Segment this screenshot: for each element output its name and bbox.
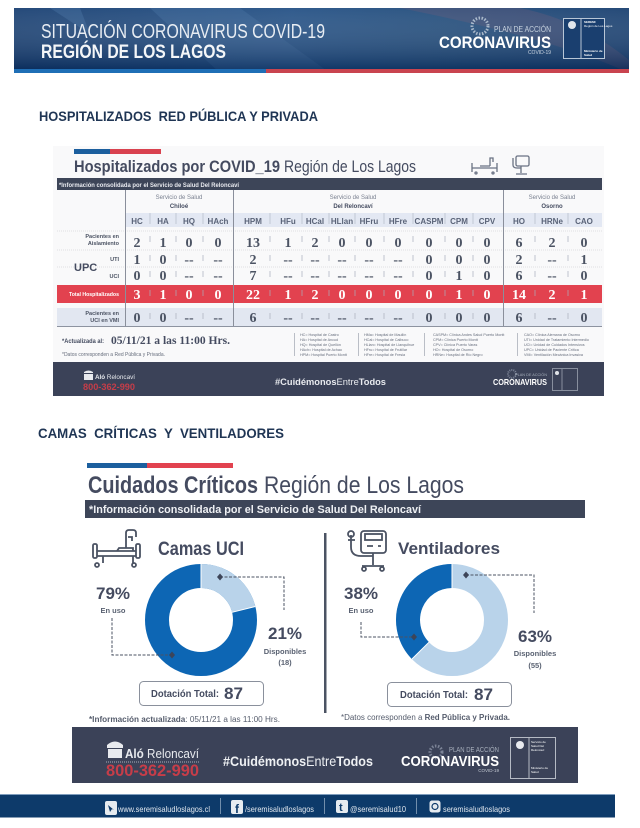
callout: ventiladores en uso: [344, 584, 417, 640]
header logo: plan de acción coronavirus: [439, 18, 551, 56]
service headers: Osorno: [541, 204, 563, 210]
row: pacientes en aislamiento: 0: [394, 236, 402, 251]
row: total hospitalizados: 0: [484, 288, 490, 303]
legend: hospital abbreviations: HQ= Hospital de Quellón: [300, 343, 341, 347]
row: total hospitalizados: 0: [338, 288, 346, 303]
row: uti: 0: [484, 253, 490, 268]
legend: hospital abbreviations: CAO= Clínica Alemana de Osorno: [524, 333, 580, 337]
row: uci: --: [184, 269, 194, 284]
row labels: Pacientes en: [85, 311, 120, 317]
icon: ventilator: [348, 531, 386, 571]
update note: 05/11/21 a las 11:00 Hrs.: [111, 333, 230, 347]
service headers: Servicio de Salud: [330, 195, 376, 201]
footer: instagram: [430, 800, 510, 814]
info bar: *Información consolidada por el Servicio de Salud Del Reloncaví: [89, 504, 422, 516]
row: total hospitalizados: 0: [426, 288, 432, 303]
legend: hospital abbreviations: HCal= Hospital de Calbuco: [364, 338, 408, 342]
callout: camas en uso: [96, 584, 175, 658]
row: uti: 2: [250, 253, 256, 268]
row: uti: --: [310, 253, 320, 268]
legend: hospital abbreviations: VMI= Ventilación Mecánica Invasiva: [524, 353, 584, 357]
row: total hospitalizados: 1: [284, 288, 292, 303]
row: total hospitalizados: 1: [160, 288, 166, 303]
row: pacientes en aislamiento: 0: [338, 236, 346, 251]
column headers: HRNe: [541, 217, 563, 226]
column headers: HLlan: [331, 217, 353, 226]
header title: SITUACIÓN CORONAVIRUS COVID-19: [41, 20, 325, 43]
row: uti: 2: [516, 253, 522, 268]
row: uci: 0: [160, 269, 166, 284]
icon: hospital bed small: [472, 158, 497, 174]
column headers: HAch: [208, 217, 229, 226]
legend: hospital abbreviations: HFre= Hospital de Fresia: [364, 353, 406, 357]
row: pacientes en aislamiento: 2: [312, 236, 318, 251]
logo: servicio de salud: Salud: [531, 770, 539, 774]
table title: [74, 157, 416, 176]
row: total hospitalizados: 0: [214, 288, 222, 303]
column headers: HQ: [183, 217, 195, 226]
donut: ventiladores: [408, 564, 496, 664]
total row band: [57, 285, 602, 303]
row: uti: 0: [426, 253, 432, 268]
callout: ventiladores en uso: 38%: [344, 584, 378, 603]
vmi row band: [57, 308, 602, 326]
header logo: ministerio: Región de Los Lagos: [584, 24, 613, 28]
callout: ventiladores disponibles: 63%: [518, 627, 552, 646]
row: uci: --: [337, 269, 347, 284]
row: uci: 7: [250, 269, 256, 284]
row: total hospitalizados: 2: [312, 288, 318, 303]
table footer band: Aló Reloncaví: [95, 374, 135, 381]
row: total hospitalizados: 3: [134, 288, 140, 303]
footnote: información actualizada: *Información actualizada : 05/11/21 a las 11:00 Hrs.: [89, 715, 280, 724]
table footer band: CORONAVIRUS: [493, 377, 547, 387]
header title: [41, 20, 325, 63]
title: ventiladores: Ventiladores: [398, 539, 500, 558]
row: uci en vmi: --: [337, 311, 347, 326]
footer: facebook: f: [235, 802, 240, 816]
row labels: UCI en VMI: [90, 318, 119, 324]
row labels: [69, 234, 120, 324]
heading: hospitalizados: HOSPITALIZADOS RED PÚBLICA Y PRIVADA: [39, 107, 318, 124]
callout: ventiladores disponibles: (55): [528, 661, 542, 670]
table footer band: #CuidémonosEntreTodos: [275, 377, 386, 388]
column headers: [131, 217, 593, 226]
row: uci en vmi: 6: [516, 311, 522, 326]
legend: hospital abbreviations: HAch= Hospital de Achao: [300, 348, 342, 352]
row: uci en vmi: 0: [426, 311, 432, 326]
row: uci en vmi: --: [213, 311, 223, 326]
panel title: Región de Los Lagos: [264, 472, 464, 499]
column headers: CPM: [450, 217, 468, 226]
logo: coronavirus: COVID-19: [478, 768, 499, 773]
row: uci en vmi: --: [310, 311, 320, 326]
row: uci: [134, 269, 588, 284]
callout: camas disponibles: 21%: [268, 624, 302, 643]
donut: camas uci: [157, 564, 255, 664]
row: uti: --: [547, 253, 557, 268]
row: uci: --: [283, 269, 293, 284]
box: dotación total camas: 87: [224, 684, 243, 703]
table footer band: 800-362-990: [83, 382, 135, 392]
legend: hospital abbreviations: UPC= Unidad de Paciente Crítica: [524, 348, 580, 352]
row: pacientes en aislamiento: 0: [366, 236, 372, 251]
row: uti: --: [213, 253, 223, 268]
box: dotación total camas: Dotación Total:: [151, 689, 219, 700]
footer: facebook: /seremisaludloslagos: [245, 804, 314, 814]
row labels: UPC: [74, 262, 97, 274]
row: uci: 0: [426, 269, 432, 284]
panel title: [88, 472, 464, 499]
row: uci en vmi: 0: [134, 311, 140, 326]
header title: REGIÓN DE LOS LAGOS: [41, 41, 226, 63]
footer: twitter: [336, 800, 406, 814]
hashtag: #CuidémonosEntreTodos: [223, 753, 373, 769]
legend: hospital abbreviations: HLlan= Hospital de Llanquihue: [364, 343, 414, 347]
service headers: Chiloé: [170, 204, 189, 210]
row labels: UTI: [110, 257, 119, 263]
row: uci en vmi: --: [547, 311, 557, 326]
row: total hospitalizados: 1: [580, 288, 588, 303]
row: total hospitalizados: 22: [246, 288, 260, 303]
footer: twitter: @seremisalud10: [350, 804, 406, 814]
row: uti: [134, 253, 588, 268]
row: uci en vmi: --: [393, 311, 403, 326]
row labels: Total Hospitalizados: [69, 292, 119, 298]
row: uci en vmi: 0: [580, 311, 588, 326]
logo: servicio de salud: [510, 738, 556, 778]
row: uti: 1: [134, 253, 140, 268]
callout: camas en uso: En uso: [100, 606, 126, 615]
icon: ventilator small: [513, 156, 529, 174]
footnote: datos: *Datos corresponden a Red Pública y Privada.: [341, 713, 510, 722]
row: total hospitalizados: 0: [394, 288, 402, 303]
row: uci: --: [393, 269, 403, 284]
row: uti: 0: [160, 253, 166, 268]
row: uci: 0: [484, 269, 490, 284]
logo: coronavirus: CORONAVIRUS: [401, 753, 499, 770]
table title: Región de Los Lagos: [284, 157, 416, 176]
header logo: ministerio: Ministerio de: [584, 49, 603, 53]
legend: hospital abbreviations: HFru= Hospital de Frutillar: [364, 348, 408, 352]
row: total hospitalizados: 14: [512, 288, 526, 303]
row: uci: --: [213, 269, 223, 284]
row: uci en vmi: [134, 311, 588, 326]
footer bar: [0, 794, 615, 818]
update note: [62, 333, 230, 358]
row: uti: --: [184, 253, 194, 268]
row: uti: --: [393, 253, 403, 268]
row: pacientes en aislamiento: 0: [214, 236, 222, 251]
service headers: Servicio de Salud: [529, 195, 575, 201]
column headers: CASPM: [415, 217, 444, 226]
column headers: HPM: [244, 217, 262, 226]
legend: hospital abbreviations: CPM= Clínica Puerto Montt: [433, 338, 478, 342]
service headers: Servicio de Salud: [156, 195, 202, 201]
callout: ventiladores disponibles: [463, 572, 556, 670]
callout: camas disponibles: Disponibles: [264, 647, 306, 656]
row: uci: --: [364, 269, 374, 284]
logo: servicio de salud: Reloncaví: [531, 748, 545, 752]
box: dotación total ventiladores: Dotación Total:: [400, 690, 468, 701]
header logo: ministerio: [564, 18, 613, 59]
row: uci en vmi: 6: [250, 311, 256, 326]
row: uci: 6: [516, 269, 522, 284]
legend: hospital abbreviations: [300, 333, 589, 357]
bottom band: [72, 727, 578, 783]
panel: cuidados críticos: [72, 463, 585, 783]
legend: hospital abbreviations: UTI= Unidad de Tratamiento Intermedio: [524, 338, 589, 342]
table footer band: PLAN DE ACCIÓN: [515, 372, 547, 377]
footer: instagram: seremisaludloslagos: [443, 804, 510, 814]
info bar: [85, 500, 585, 518]
legend: hospital abbreviations: HC= Hospital de Castro: [300, 333, 339, 337]
footer: website: [105, 801, 210, 815]
row: total hospitalizados: 1: [456, 288, 462, 303]
row: pacientes en aislamiento: [134, 236, 588, 251]
column headers: CAO: [575, 217, 593, 226]
callout: camas disponibles: (18): [278, 658, 292, 667]
legend: hospital abbreviations: HPM= Hospital Puerto Montt: [300, 353, 347, 357]
row: pacientes en aislamiento: 2: [134, 236, 140, 251]
legend: hospital abbreviations: CASPM= Clínica Andes Salud Puerto Montt: [433, 333, 504, 337]
row: pacientes en aislamiento: 0: [580, 236, 588, 251]
row: pacientes en aislamiento: 1: [284, 236, 292, 251]
header banner: [14, 8, 629, 73]
legend: hospital abbreviations: HRNe= Hospital de Río Negro: [433, 353, 482, 357]
aló reloncaví phone line: 800-362-990: [106, 761, 199, 780]
aló reloncaví phone line: Aló Reloncaví: [125, 746, 199, 761]
logo: servicio de salud: Salud Del: [531, 744, 544, 748]
row: total hospitalizados: 2: [548, 288, 556, 303]
callout: camas disponibles: [217, 574, 306, 667]
service headers: Del Reloncaví: [333, 204, 373, 210]
icon: hospital bed: [93, 530, 140, 567]
box: dotación total ventiladores: [388, 682, 512, 706]
panel: hospitalizados table: [53, 146, 604, 396]
row: uti: 0: [456, 253, 462, 268]
update note: *Datos corresponden a Red Pública y Privada.: [62, 352, 165, 358]
row: uci en vmi: --: [184, 311, 194, 326]
table footer band: [53, 362, 604, 396]
row: uci: 1: [456, 269, 462, 284]
column headers: HCal: [306, 217, 324, 226]
box: dotación total camas: [140, 682, 264, 706]
row: uci: --: [547, 269, 557, 284]
legend: hospital abbreviations: HO= Hospital de Osorno: [433, 348, 473, 352]
row: pacientes en aislamiento: 0: [186, 236, 192, 251]
logo: coronavirus: PLAN DE ACCIÓN: [449, 745, 499, 754]
row: pacientes en aislamiento: 0: [484, 236, 490, 251]
row labels: UCI: [110, 274, 119, 280]
update note: *Actualizada al:: [62, 338, 104, 345]
column headers: HFre: [389, 217, 408, 226]
row: uci en vmi: --: [283, 311, 293, 326]
row: uti: --: [283, 253, 293, 268]
box: dotación total ventiladores: 87: [474, 685, 493, 704]
header logo: ministerio: SEREMI: [584, 20, 596, 24]
logo: coronavirus: [401, 745, 499, 773]
column headers: HFru: [360, 217, 378, 226]
header logo: plan de acción coronavirus: CORONAVIRUS: [439, 33, 551, 52]
row: uci: 0: [580, 269, 588, 284]
row: uci: --: [310, 269, 320, 284]
title: camas uci: Camas UCI: [158, 539, 244, 560]
row: pacientes en aislamiento: 2: [548, 236, 556, 251]
column headers: HC: [131, 217, 143, 226]
row: total hospitalizados: 0: [366, 288, 372, 303]
legend: hospital abbreviations: HA= Hospital de Ancud: [300, 338, 338, 342]
aló reloncaví phone line: [106, 746, 199, 780]
icon: phone: [107, 742, 123, 758]
column headers: CPV: [479, 217, 496, 226]
info bar: *Información consolidada por el Servicio de Salud Del Reloncaví: [59, 183, 239, 189]
heading: camas críticas: CAMAS CRÍTICAS Y VENTILADORES: [38, 425, 284, 441]
row: uci en vmi: --: [364, 311, 374, 326]
footer: website: www.seremisaludloslagos.cl: [117, 804, 210, 814]
service headers: [156, 195, 575, 210]
row: total hospitalizados: 0: [186, 288, 192, 303]
row: pacientes en aislamiento: 13: [246, 236, 260, 251]
footer: facebook: [231, 800, 314, 816]
column headers: HO: [513, 217, 525, 226]
row labels: Aislamiento: [88, 241, 120, 247]
header logo: ministerio: Salud: [584, 53, 592, 57]
callout: ventiladores en uso: En uso: [348, 606, 374, 615]
header logo: plan de acción coronavirus: PLAN DE ACCIÓN: [494, 25, 551, 34]
column headers: HFu: [280, 217, 296, 226]
row: uci: 0: [134, 269, 140, 284]
table title: Hospitalizados por COVID_19: [74, 157, 280, 176]
legend: hospital abbreviations: CPV= Clínica Puerto Varas: [433, 343, 477, 347]
callout: ventiladores disponibles: Disponibles: [514, 649, 556, 658]
row: uci en vmi: 0: [484, 311, 490, 326]
divider: [324, 533, 326, 713]
panel title: Cuidados Críticos: [88, 472, 258, 499]
row: uti: --: [337, 253, 347, 268]
row: uci en vmi: 0: [456, 311, 462, 326]
logo: servicio de salud: Servicio de: [531, 740, 546, 744]
row: pacientes en aislamiento: 0: [456, 236, 462, 251]
row: uti: --: [364, 253, 374, 268]
legend: hospital abbreviations: UCI= Unidad de Cuidados Intensivos: [524, 343, 585, 347]
header logo: plan de acción coronavirus: COVID-19: [528, 50, 551, 56]
row: total hospitalizados: [134, 288, 588, 303]
row: pacientes en aislamiento: 0: [426, 236, 432, 251]
logo: servicio de salud: Ministerio de: [531, 766, 548, 770]
row: pacientes en aislamiento: 1: [160, 236, 166, 251]
row: uci en vmi: 0: [160, 311, 166, 326]
column headers: HA: [157, 217, 169, 226]
info bar: [57, 178, 602, 190]
row labels: Pacientes en: [85, 234, 120, 240]
row: uti: 1: [580, 253, 588, 268]
row: pacientes en aislamiento: 6: [516, 236, 522, 251]
callout: camas en uso: 79%: [96, 584, 130, 603]
footer: twitter: t: [339, 802, 343, 814]
legend: hospital abbreviations: HMa= Hospital de Maullín: [364, 333, 406, 337]
